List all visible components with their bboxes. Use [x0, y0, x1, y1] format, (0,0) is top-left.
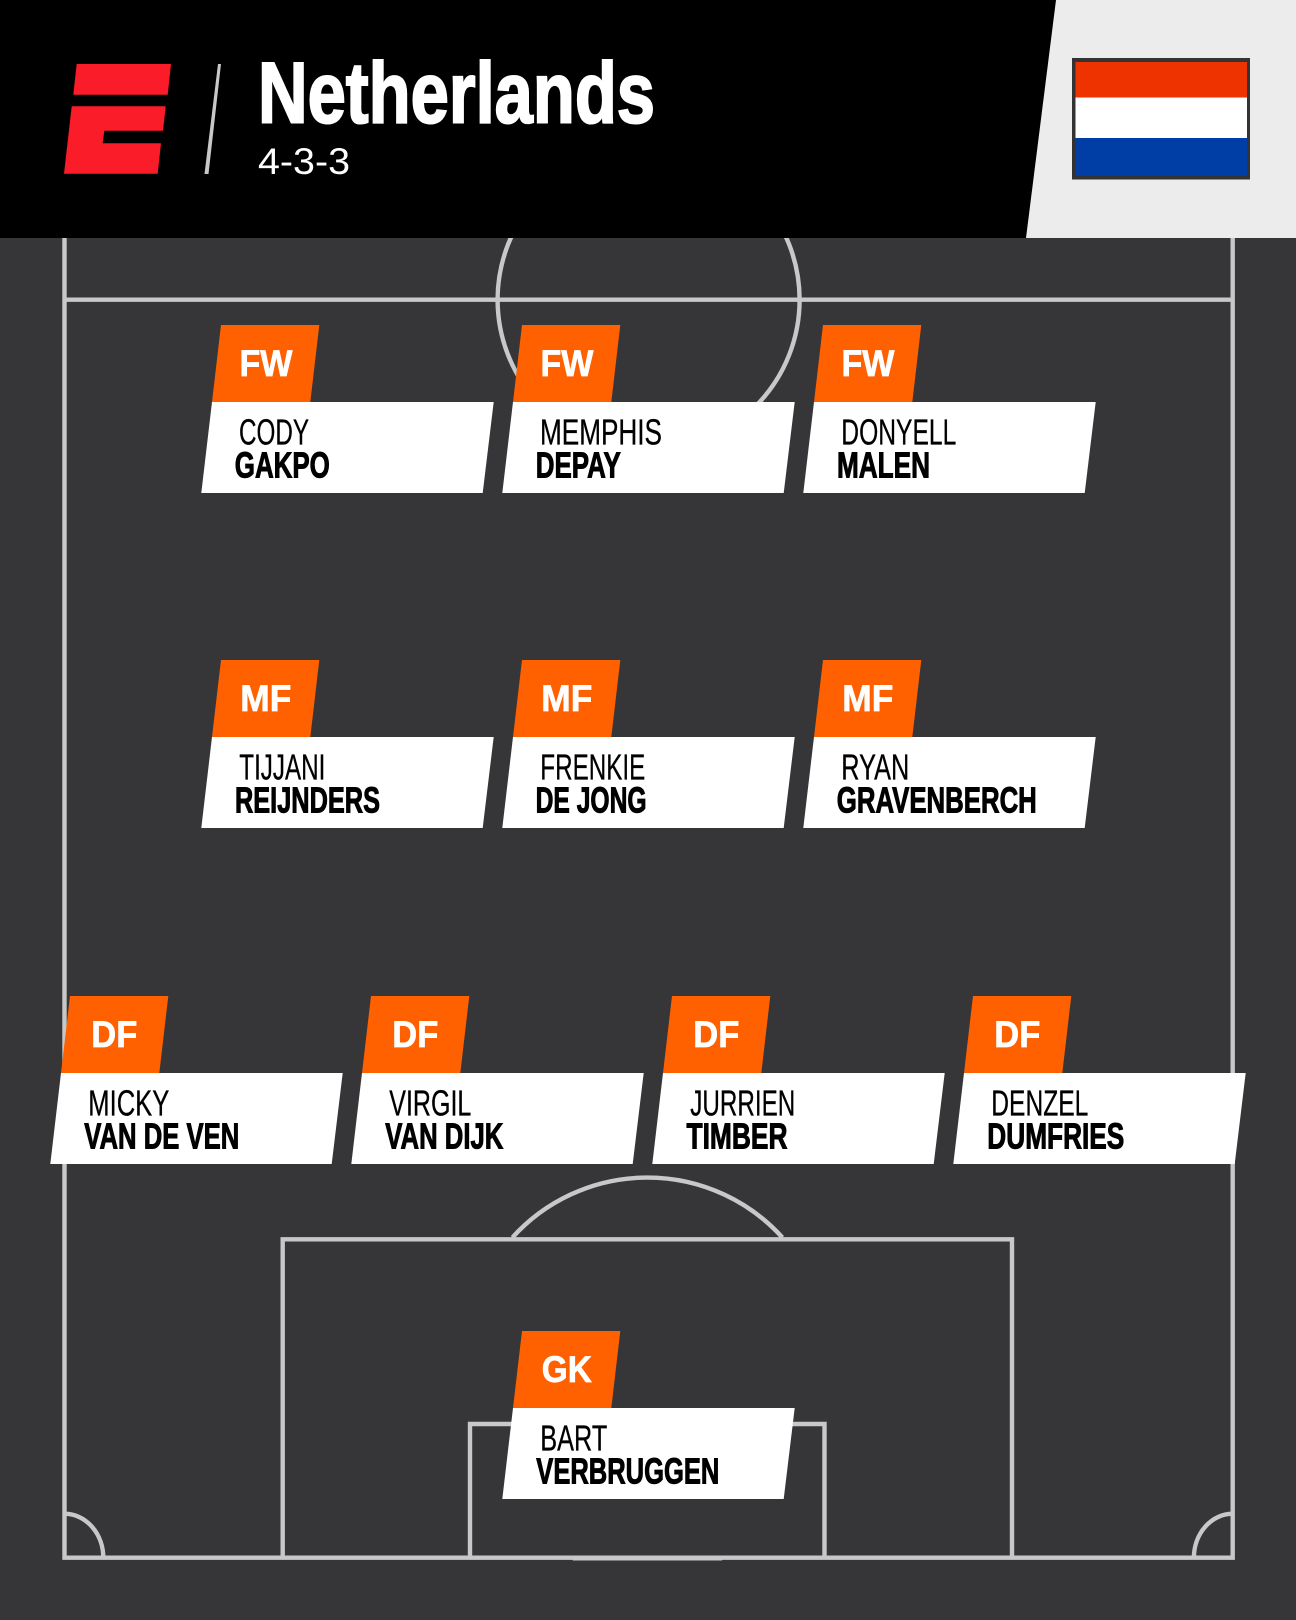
- player: Memphis Depay: DEPAY: [536, 445, 621, 486]
- player: Virgil van Dijk: [351, 996, 644, 1164]
- player: Cody Gakpo: CODY: [239, 412, 309, 452]
- player: Ryan Gravenberch: GRAVENBERCH: [837, 780, 1037, 821]
- player: Denzel Dumfries: [953, 996, 1246, 1164]
- player: Cody Gakpo: GAKPO: [235, 445, 330, 486]
- player: Tijjani Reijnders: REIJNDERS: [235, 780, 380, 821]
- header band: [0, 0, 1296, 238]
- player: Donyell Malen: FW: [841, 343, 895, 384]
- player: Cody Gakpo: [201, 325, 494, 493]
- player: Jurrien Timber: JURRIEN: [690, 1083, 795, 1124]
- title: Netherlands: [258, 46, 655, 142]
- player: Virgil van Dijk: VIRGIL: [389, 1083, 471, 1124]
- player: Denzel Dumfries: DF: [994, 1014, 1040, 1055]
- player: Ryan Gravenberch: MF: [842, 678, 893, 719]
- player: Memphis Depay: FW: [540, 343, 594, 384]
- player: Bart Verbruggen: BART: [540, 1418, 607, 1459]
- player: Frenkie de Jong: MF: [541, 678, 592, 719]
- player: Jurrien Timber: [652, 996, 945, 1164]
- player: Denzel Dumfries: DUMFRIES: [987, 1116, 1124, 1157]
- player: Micky van de Ven: [50, 996, 343, 1164]
- player: Donyell Malen: [803, 325, 1096, 493]
- player: Tijjani Reijnders: MF: [240, 678, 291, 719]
- player: Micky van de Ven: DF: [91, 1014, 137, 1055]
- player: Cody Gakpo: FW: [240, 343, 293, 384]
- player: Tijjani Reijnders: [201, 660, 494, 828]
- player: Memphis Depay: MEMPHIS: [540, 412, 662, 452]
- formation: 4-3-3: [258, 141, 350, 182]
- icon: Netherlands flag: [1072, 58, 1250, 180]
- player: Donyell Malen: DONYELL: [841, 412, 956, 452]
- player: Bart Verbruggen: [502, 1331, 795, 1499]
- player: Micky van de Ven: VAN DE VEN: [84, 1116, 239, 1157]
- player: Jurrien Timber: DF: [693, 1014, 739, 1055]
- player: Frenkie de Jong: [502, 660, 795, 828]
- logo divider: [204, 64, 221, 174]
- player: Denzel Dumfries: DENZEL: [991, 1083, 1088, 1124]
- player: Bart Verbruggen: VERBRUGGEN: [536, 1451, 719, 1492]
- player: Memphis Depay: [502, 325, 795, 493]
- player: Frenkie de Jong: FRENKIE: [540, 747, 645, 788]
- player: Jurrien Timber: TIMBER: [686, 1116, 787, 1157]
- player: Ryan Gravenberch: [803, 660, 1096, 828]
- icon: ESPN E logo: [64, 64, 171, 174]
- player: Ryan Gravenberch: RYAN: [841, 747, 909, 788]
- player: Virgil van Dijk: VAN DIJK: [385, 1116, 503, 1157]
- player: Frenkie de Jong: DE JONG: [536, 780, 647, 821]
- player: Micky van de Ven: MICKY: [88, 1083, 169, 1124]
- player: Virgil van Dijk: DF: [392, 1014, 438, 1055]
- player: Bart Verbruggen: GK: [542, 1349, 592, 1390]
- player: Donyell Malen: MALEN: [837, 445, 930, 486]
- soccer pitch markings: [64, 149, 1233, 1560]
- flag panel: [1026, 0, 1296, 238]
- player: Tijjani Reijnders: TIJJANI: [239, 747, 325, 788]
